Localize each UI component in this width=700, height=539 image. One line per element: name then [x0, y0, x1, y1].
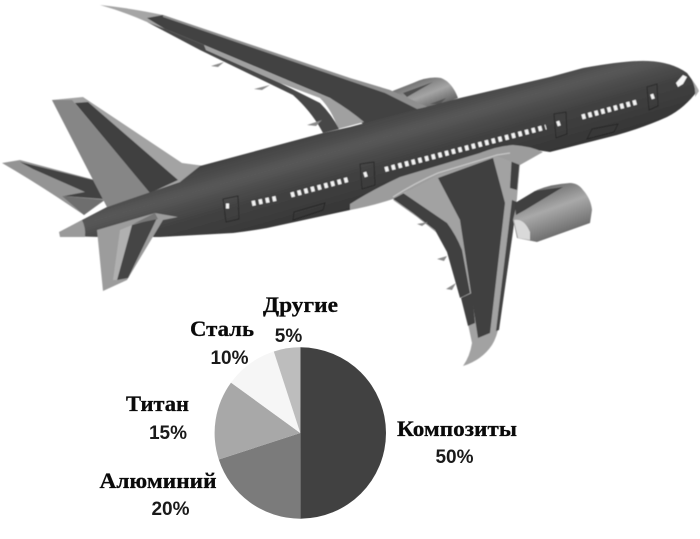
lower engine	[513, 183, 592, 242]
fuselage	[60, 61, 698, 237]
slice: aluminium 20%	[219, 433, 300, 519]
label: other: 5%	[275, 326, 302, 347]
rear spar strip	[510, 153, 520, 190]
trailing dark flap	[392, 193, 470, 298]
lower tail stabilizer	[97, 213, 178, 291]
label: aluminium: 20%	[151, 499, 190, 520]
flap fairings	[211, 62, 322, 126]
slice: titanium 15%	[215, 383, 300, 460]
belly fairing	[350, 145, 543, 210]
airplane illustration	[2, 5, 699, 366]
vertical fin	[52, 97, 220, 207]
pie chart: material shares	[215, 347, 386, 519]
tail cone	[59, 220, 85, 237]
upper wing	[100, 5, 428, 133]
label: composites	[397, 416, 517, 468]
flap fairings	[417, 222, 456, 290]
upper engine	[390, 78, 458, 110]
label: other: Другие	[263, 292, 338, 317]
label: steel: Сталь	[190, 316, 254, 341]
wing main dark panel	[147, 15, 428, 124]
doors	[223, 84, 658, 222]
lower right wing	[392, 150, 520, 366]
slice: other 5%	[274, 347, 300, 433]
cockpit windshield	[676, 75, 687, 87]
label: composites: 50%	[435, 447, 474, 468]
label: steel	[190, 316, 254, 369]
label: aluminium	[100, 468, 217, 520]
label: other	[263, 292, 338, 347]
leading edge strip	[496, 200, 517, 331]
wing tip	[100, 5, 170, 32]
slice: composites 50%	[300, 347, 386, 519]
label: titanium: Титан	[126, 391, 189, 416]
label: titanium	[126, 391, 189, 444]
windows	[226, 96, 654, 206]
light flap strip	[204, 45, 364, 129]
label: steel: 10%	[210, 348, 249, 369]
label: aluminium: Алюминий	[100, 468, 217, 493]
trailing dark band	[147, 22, 339, 133]
leading edge light line	[163, 15, 428, 109]
wing root highlight	[393, 153, 510, 197]
wing centre dark panel	[438, 158, 505, 338]
horizontal stabilizer, far side	[2, 160, 105, 215]
label: titanium: 15%	[149, 423, 187, 444]
label: composites: Композиты	[397, 416, 517, 441]
slice: steel 10%	[231, 352, 300, 433]
